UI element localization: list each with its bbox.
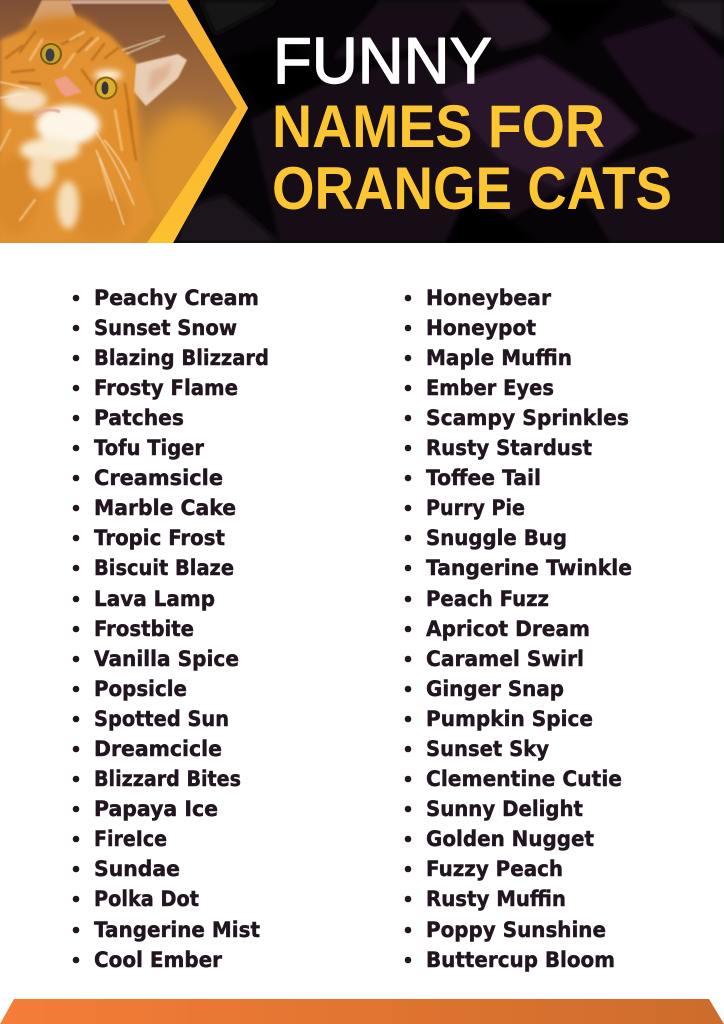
left column of names: Frostbite: [94, 617, 194, 641]
right ear: [134, 54, 187, 106]
title line: orange cats: ORANGE CATS: [272, 155, 672, 222]
right column of names: Purry Pie: [426, 496, 525, 520]
right column of names: Scampy Sprinkles: [426, 406, 629, 430]
right column of names: [405, 286, 632, 972]
left column of names: Sunset Snow: [94, 316, 237, 340]
header banner: [0, 0, 724, 244]
right column of names: Sunny Delight: [426, 797, 583, 821]
right column of names: Sunset Sky: [426, 737, 549, 761]
orange footer bar: [0, 999, 724, 1024]
left column of names: Lava Lamp: [94, 587, 215, 611]
title: [272, 24, 672, 222]
right column of names: Tangerine Twinkle: [426, 556, 632, 580]
right column of names: Rusty Muffin: [426, 887, 566, 911]
right column of names: Caramel Swirl: [426, 647, 584, 671]
left column of names: Blizzard Bites: [94, 767, 241, 791]
right column of names: Honeypot: [426, 316, 536, 340]
left column of names: Peachy Cream: [94, 286, 259, 310]
dark geometric background: [170, 0, 724, 243]
right column of names: Rusty Stardust: [426, 436, 592, 460]
left ear: [28, 0, 76, 30]
left column of names: Vanilla Spice: [94, 647, 239, 671]
left column of names: Creamsicle: [94, 466, 223, 490]
left column of names: Dreamcicle: [94, 737, 222, 761]
right column of names: Apricot Dream: [426, 617, 590, 641]
right column of names: Poppy Sunshine: [426, 918, 606, 942]
left column of names: Frosty Flame: [94, 376, 238, 400]
left column of names: Tofu Tiger: [94, 436, 205, 460]
right column of names: Ember Eyes: [426, 376, 554, 400]
shaded fur: [0, 16, 139, 241]
yellow chevron: [147, 0, 248, 243]
left column of names: Patches: [94, 406, 184, 430]
left column of names: Marble Cake: [94, 496, 236, 520]
title line: names for: NAMES FOR: [272, 93, 605, 160]
fur streaks: [6, 32, 136, 160]
right column of names: Toffee Tail: [426, 466, 541, 490]
right column of names: Honeybear: [426, 286, 552, 310]
left column of names: Tangerine Mist: [94, 918, 260, 942]
nose: [54, 76, 82, 97]
left column of names: Papaya Ice: [94, 797, 218, 821]
white chest and muzzle: [3, 70, 122, 229]
title line: funny: FUNNY: [273, 24, 492, 97]
left column of names: Tropic Frost: [94, 526, 225, 550]
cat photo: [0, 0, 240, 244]
left column of names: [73, 286, 269, 972]
right column of names: Peach Fuzz: [426, 587, 549, 611]
left column of names: FireIce: [94, 827, 167, 851]
right column of names: Snuggle Bug: [426, 526, 567, 550]
right column of names: Maple Muffin: [426, 346, 572, 370]
left column of names: Popsicle: [94, 677, 187, 701]
left column of names: Spotted Sun: [94, 707, 229, 731]
right eye: [94, 76, 118, 100]
right column of names: Ginger Snap: [426, 677, 564, 701]
body fur: [0, 16, 155, 243]
left column of names: Polka Dot: [94, 887, 199, 911]
left column of names: Cool Ember: [94, 948, 223, 972]
left column of names: Blazing Blizzard: [94, 346, 269, 370]
left eye: [40, 43, 62, 65]
left column of names: Biscuit Blaze: [94, 556, 234, 580]
left column of names: Sundae: [94, 857, 180, 881]
right column of names: Golden Nugget: [426, 827, 594, 851]
mouth: [34, 110, 60, 116]
right column of names: Pumpkin Spice: [426, 707, 593, 731]
right column of names: Buttercup Bloom: [426, 948, 615, 972]
right column of names: Clementine Cutie: [426, 767, 622, 791]
right column of names: Fuzzy Peach: [426, 857, 563, 881]
